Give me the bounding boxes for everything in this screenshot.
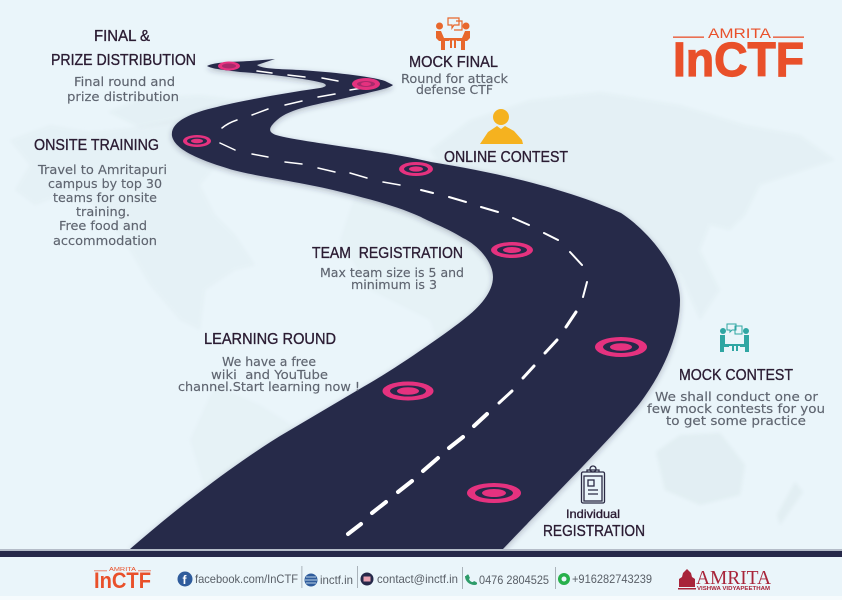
step: mock contest: few mock contests for you [647,402,825,416]
step: team registration [312,245,464,292]
road markers [183,62,647,503]
step: onsite training: Free food and [59,219,147,233]
step: final and prize distribution: prize distribution [67,90,179,104]
footer band [0,549,842,600]
step: mock contest [647,367,825,428]
step: learning round: wiki and YouTube [211,368,328,382]
step: online contest: ONLINE CONTEST [444,149,568,166]
logo: Amrita Vishwa Vidyapeetham: VISHWA VIDYAPEETHAM [697,586,770,592]
step: onsite training: accommodation [53,234,157,248]
step: individual registration [543,507,645,540]
phone number: 0476 2804525 [479,573,549,587]
step: onsite training: training. [76,205,130,219]
step: onsite training [34,137,167,248]
step: individual registration: REGISTRATION [543,523,645,540]
world map [10,92,835,545]
step: mock final: MOCK FINAL [409,54,498,71]
step: mock final [401,54,508,97]
step: mock final: Round for attack [401,72,508,86]
logo: Amrita InCTF: AMRITA [708,25,772,41]
icon: online contest person [480,109,523,144]
step: learning round: channel.Start learning now ! [178,380,360,394]
step: onsite training: campus by top 30 [48,177,162,191]
footer logo: AMRITA [109,567,136,573]
step: onsite training: ONSITE TRAINING [34,137,159,154]
step: onsite training: teams for onsite [53,191,157,205]
step: onsite training: Travel to Amritapuri [37,163,167,177]
website link: inctf.in [320,573,353,587]
step: mock contest: MOCK CONTEST [679,367,793,384]
step: final and prize distribution: Final round and [74,75,175,89]
facebook link: f [182,573,188,587]
step: mock final: defense CTF [416,83,493,97]
footer contacts [178,566,652,589]
logo: Amrita Vishwa Vidyapeetham [678,567,772,592]
step: learning round: We have a free [222,355,316,369]
step: final and prize distribution: FINAL & [94,28,150,45]
logo: Amrita InCTF: InCTF [673,34,804,87]
email link: contact@inctf.in [377,572,458,586]
road [130,59,680,549]
step: mock contest: We shall conduct one or [655,390,818,404]
whatsapp number: +916282743239 [572,572,652,586]
step: final and prize distribution [51,28,196,104]
icon: mock final meeting [436,18,470,50]
step: individual registration: Individual [566,507,620,521]
step: mock contest: to get some practice [666,414,806,428]
footer logo: InCTF [94,568,151,593]
step: team registration: minimum is 3 [351,278,437,292]
facebook link: facebook.com/InCTF [195,572,298,586]
icon: mock contest meeting [720,324,749,352]
step: team registration: Max team size is 5 and [320,266,464,280]
step: learning round: LEARNING ROUND [204,331,336,348]
logo: Amrita Vishwa Vidyapeetham: AMRITA [696,567,772,589]
step: learning round [178,331,360,394]
step: team registration: TEAM REGISTRATION [312,245,463,262]
icon: registration clipboard [582,466,604,503]
step: final and prize distribution: PRIZE DISTRIBUTION [51,52,196,69]
website link [304,573,353,587]
road centre dashes [220,71,587,534]
